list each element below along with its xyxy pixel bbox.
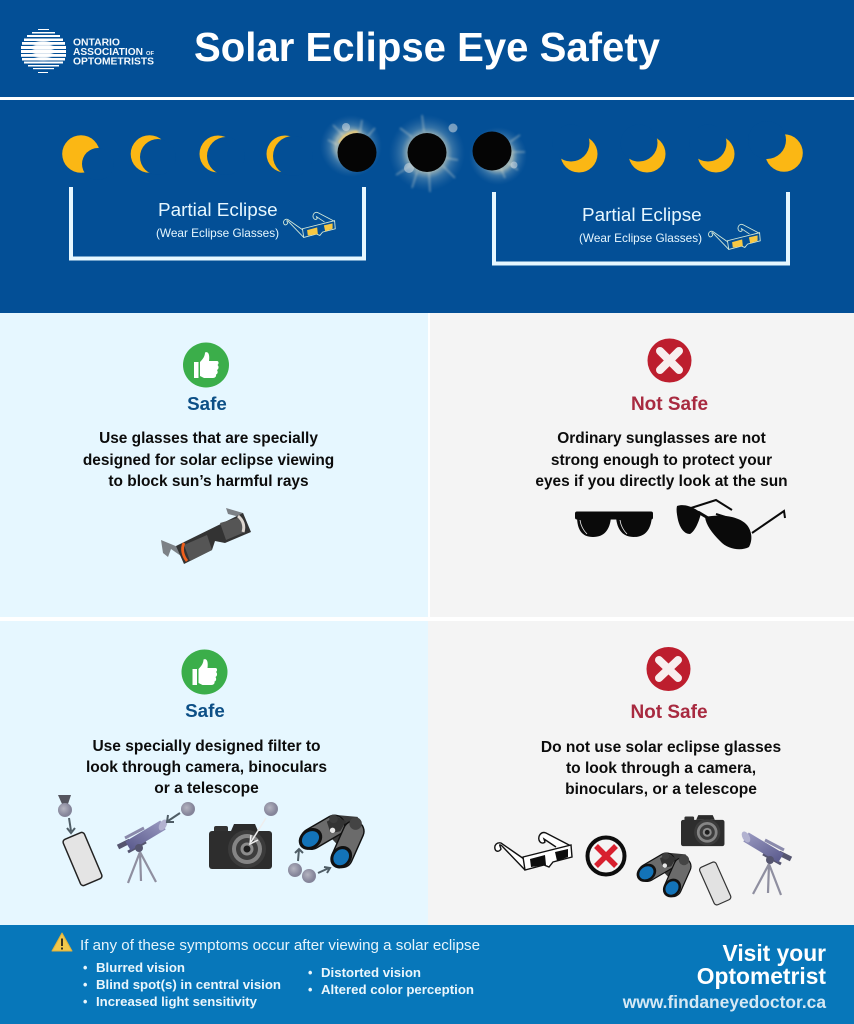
left bracket xyxy=(71,187,364,258)
partial phases, left xyxy=(62,135,313,180)
symptoms list, column two: • xyxy=(308,983,312,997)
symptoms list, column two: Distorted vision xyxy=(321,966,421,980)
heading: Not Safe xyxy=(630,702,708,723)
title: Solar Eclipse Eye Safety xyxy=(194,24,660,70)
corona glow middle xyxy=(389,115,465,191)
eclipse band xyxy=(0,100,854,313)
icon: thumbs up xyxy=(183,342,229,388)
corona glow right xyxy=(469,127,527,185)
icon: thumbs up xyxy=(182,650,228,694)
symptoms list, column one: • xyxy=(83,961,87,975)
text block: binoculars, or a telescope xyxy=(565,781,757,798)
heading: Not Safe xyxy=(631,394,708,415)
left label: (Wear Eclipse Glasses) xyxy=(156,226,279,240)
icon: aviator sunglasses xyxy=(677,500,785,549)
call to action: Visit your xyxy=(723,940,826,966)
text block: Do not use solar eclipse glasses xyxy=(541,739,781,756)
text block xyxy=(535,430,788,490)
text block: to block sun’s harmful rays xyxy=(108,473,309,490)
footer band xyxy=(0,925,854,1024)
logo wordmark: OF xyxy=(146,51,155,57)
symptoms list, column one: Blind spot(s) in central vision xyxy=(96,978,281,992)
icon: phone xyxy=(699,861,732,906)
symptoms list, column two: Altered color perception xyxy=(321,983,474,997)
partial phases, right xyxy=(552,121,803,172)
icon: solar viewing glasses xyxy=(161,508,251,564)
text block: Use specially designed filter to xyxy=(92,738,321,755)
icon: warning triangle xyxy=(52,933,72,951)
text block: Use glasses that are specially xyxy=(99,430,318,447)
corona glow left xyxy=(320,115,382,177)
logo wordmark xyxy=(73,38,155,68)
symptoms list, column two: • xyxy=(308,966,312,980)
text block: to look through a camera, xyxy=(566,760,756,777)
symptoms list, column one: • xyxy=(83,995,87,1009)
icon: left eclipse glasses xyxy=(284,212,335,237)
icon: wayfarer sunglasses xyxy=(575,512,653,537)
text block: Ordinary sunglasses are not xyxy=(557,430,766,447)
left label: Partial Eclipse xyxy=(158,200,278,221)
coronal flares xyxy=(342,123,518,173)
icon: telescope with filter xyxy=(118,802,195,883)
symptoms list, column two xyxy=(308,966,474,997)
text block xyxy=(86,738,327,797)
icon: telescope xyxy=(740,830,791,895)
icon: paper eclipse glasses xyxy=(495,833,572,870)
icon: camera with filter xyxy=(209,802,278,869)
call to action xyxy=(622,940,826,1012)
call to action: Optometrist xyxy=(697,963,826,989)
text block: strong enough to protect your xyxy=(551,452,772,469)
total eclipse suns xyxy=(320,115,527,192)
icon: red cross xyxy=(646,647,690,691)
symptoms list, column one: Blurred vision xyxy=(96,961,185,975)
logo xyxy=(21,29,155,73)
logo wordmark: ONTARIO xyxy=(73,38,120,48)
panel: not safe optics xyxy=(428,621,854,925)
header band xyxy=(0,0,854,97)
panel: safe filters xyxy=(0,621,428,925)
panel: not safe sunglasses xyxy=(430,313,854,617)
right label: (Wear Eclipse Glasses) xyxy=(579,231,702,245)
icon: binoculars xyxy=(633,852,690,901)
text block: designed for solar eclipse viewing xyxy=(83,452,334,469)
icon: right eclipse glasses xyxy=(709,224,760,249)
icon: camera xyxy=(681,815,724,846)
icon: prohibited cross xyxy=(588,838,624,874)
text block xyxy=(83,430,334,490)
text block: or a telescope xyxy=(154,780,259,797)
right label xyxy=(579,205,702,245)
gold rim xyxy=(339,132,358,143)
logo mark xyxy=(21,29,66,73)
logo wordmark: OPTOMETRISTS xyxy=(73,56,154,68)
symptoms list, column one: • xyxy=(83,978,87,992)
icon: phone with filter xyxy=(58,795,103,887)
text block: eyes if you directly look at the sun xyxy=(535,473,788,490)
corona rays xyxy=(328,115,525,192)
heading: Safe xyxy=(187,393,227,414)
heading: Safe xyxy=(185,700,225,721)
right label: Partial Eclipse xyxy=(582,205,702,226)
icon: red cross xyxy=(648,338,692,382)
right bracket xyxy=(494,192,788,264)
symptoms intro: If any of these symptoms occur after viewing a solar eclipse xyxy=(80,938,480,954)
text block: look through camera, binoculars xyxy=(86,759,327,776)
logo wordmark: ASSOCIATION xyxy=(73,47,143,58)
icon: binoculars with filters xyxy=(288,814,362,883)
symptoms list, column one: Increased light sensitivity xyxy=(96,995,257,1009)
panel: safe glasses xyxy=(0,313,428,617)
call to action: www.findaneyedoctor.ca xyxy=(622,992,826,1012)
text block xyxy=(541,739,781,798)
symptoms list, column one xyxy=(83,961,281,1009)
left label xyxy=(156,200,279,240)
